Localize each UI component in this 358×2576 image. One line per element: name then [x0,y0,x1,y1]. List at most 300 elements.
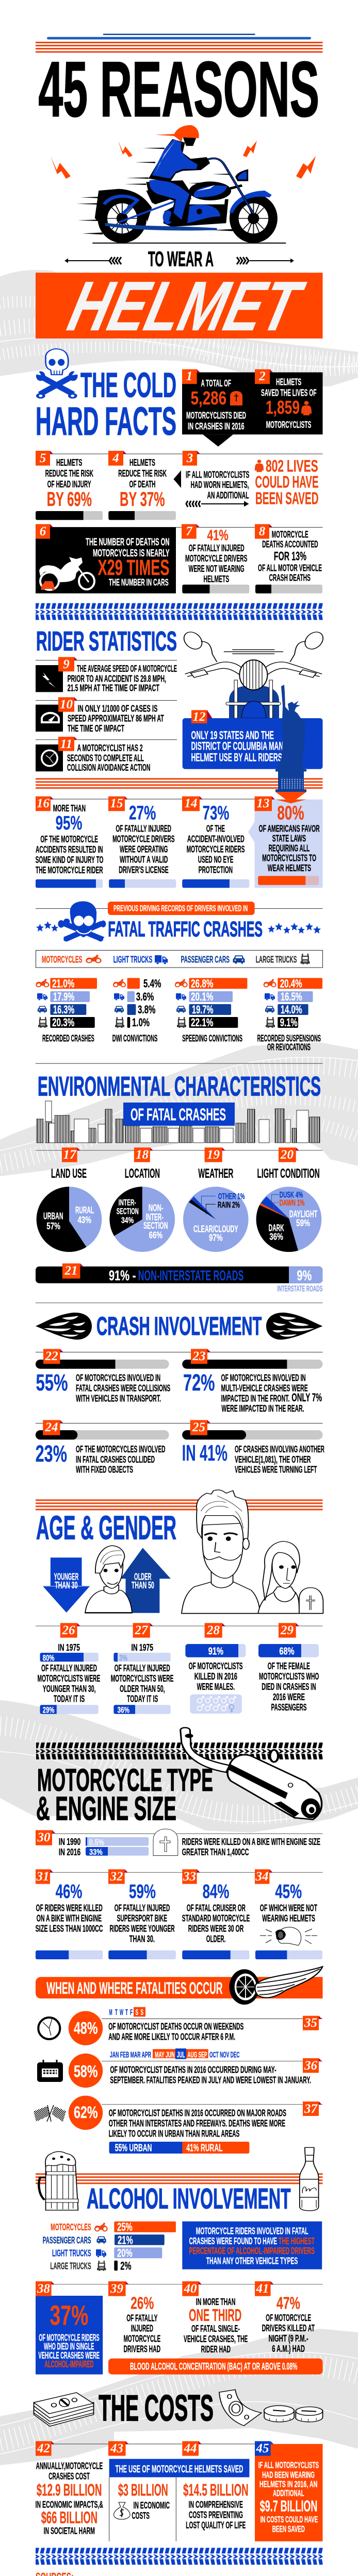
divider: blue tyre tread [36,603,323,620]
tag 25 [190,1420,210,1435]
panel: fact 5 head injury: REDUCE THE RISK [45,468,93,479]
panel: fact 42 annual cost: CRASHES COST [48,2471,90,2482]
panel: fact 10 impact speed [36,697,177,734]
panel: fact 13 americans favor: 80% [277,803,304,824]
callout: previous driving records [108,902,255,915]
panel: fact 22: 55% [36,1369,68,1396]
panel: fact 7 not wearing helmets: 41% [207,527,229,544]
tag 19: 19 [207,1148,220,1162]
heading: the cold hard facts: HARD FACTS [36,399,176,444]
panel: fact 15 license: DRIVER'S LICENSE [119,864,169,875]
tag 26: 26 [62,1623,75,1637]
chart: speeding convictions: 26.8% [191,977,214,990]
chart: recorded suspensions [257,977,322,1052]
panel: fact 4 death: OF DEATH [129,479,156,489]
arrow: older than 50 [120,1548,171,1613]
panel: fact 11 two seconds [36,737,177,773]
panel: fact 30 engine size: IN 2016 [59,1846,80,1857]
divider: black tyre tread [36,1742,323,1759]
illustration: exhaust pipe [181,1727,322,1820]
callout: previous driving records: PREVIOUS DRIVING RECORDS OF DRIVERS INVOLVED IN [113,904,248,913]
panel: fact 7 not wearing helmets [182,524,249,594]
panel: fact 9 average speed: PRIOR TO AN ACCIDENT IS 29.8 MPH, [68,673,166,684]
panel: fact 27 older riders: TODAY IT IS [127,1693,158,1704]
icon: beer mug [39,2151,78,2210]
tag 32: 32 [109,1870,123,1884]
tag 16: 16 [37,796,50,810]
heading: motorcycle type and engine size: & ENGINE SIZE [36,1790,176,1827]
pie: weather: WEATHER [198,1166,233,1181]
pie: light condition [256,1147,321,1252]
chart: recorded crashes: RECORDED CRASHES [42,1033,94,1044]
panel: deaths and lives saved: MOTORCYCLISTS [266,419,311,430]
panel: deaths and lives saved: 5,286 [191,387,226,409]
panel: fact 4 death [108,451,176,520]
panel: fact 42 annual cost: IN ECONOMIC IMPACTS,& [36,2499,103,2510]
panel: fact 29 female passengers: DIED IN CRASHES IN [262,1681,316,1692]
panel: fact 13 americans favor: STATE LAWS [272,833,306,843]
panel: fact 40: VEHICLE CRASHES, THE [184,2333,248,2344]
panel: facts 43-44 helmets saved: COSTS PREVENTING [189,2510,243,2520]
panel: fact 22: FATAL CRASHES WERE COLLISIONS [76,1383,170,1394]
panel: fact 15 license: 27% [129,803,156,824]
tag 18: 18 [136,1148,149,1162]
chart: dwi convictions: 3.6% [136,990,154,1003]
pie: light condition: DARK [269,1222,284,1233]
chart: months: AUG SEP [187,2050,207,2059]
panel: fact 12 state mandates [183,710,323,769]
panel: fact 39: INJURED [131,2323,153,2334]
tag 31 [36,1869,53,1884]
panel: fact 6 deaths vs cars: X29 TIMES [98,555,169,580]
panel: deaths and lives saved: MOTORCYCLISTS DIED [186,410,246,420]
panel: fact 22 [36,1349,170,1403]
panel: fact 42 annual cost: ANNUALLY,MOTORCYCLE [36,2461,103,2471]
icon: checkered flags [34,2105,66,2122]
panel: fact 6 deaths vs cars: MOTORCYCLES IS NEARLY [93,548,170,559]
pie: light condition: DAWN 1% [280,1198,304,1208]
panel: fact 40: ONE THIRD [189,2306,241,2325]
panel: fact 8 13 percent [255,524,322,594]
panel: fact 27 older riders [111,1623,173,1715]
panel: fact 26 younger riders: YOUNGER THAN 30, [43,1683,96,1694]
icon: speedometer box [36,705,63,732]
tag 15: 15 [110,796,123,810]
panel: fact 16 injury [36,796,103,888]
tag 18 [134,1147,153,1162]
bar: interstate vs non-interstate roads: 9% [297,1267,312,1283]
tag 32 [108,1869,128,1884]
arrow: older than 50: THAN 50 [132,1580,154,1590]
chart: months [110,2048,240,2059]
panel: facts 43-44 helmets saved [108,2441,249,2541]
panel: fact 11 two seconds: SECONDS TO COMPLETE ALL [67,752,144,763]
panel: fact 29 female passengers: 2016 WERE [273,1691,305,1702]
chart: months: OCT NOV DEC [209,2050,240,2059]
chart: weekdays: S [140,2008,143,2017]
panel: fact 23: ONLY 7% [291,1391,322,1404]
section line [36,1150,323,1151]
panel: fact 40: RIDER HAD [201,2344,231,2354]
pie: land use: LAND USE [51,1166,87,1181]
panel: fact 15 license: WITHOUT A VALID [120,854,168,865]
panel: fact 13 americans favor: WEAR HELMETS [268,862,311,873]
tag 13: 13 [257,796,269,810]
tag 1: 1 [186,369,192,383]
panel: fact 14 eye protection: PROTECTION [199,864,233,875]
panel: fact 25: IN 41% [182,1440,227,1466]
icon: gender symbols [197,1697,236,1713]
icon: flames left [36,1313,92,1340]
panel: fact 34: 45% [275,1881,302,1903]
tag 34: 34 [255,1870,268,1884]
panel: fact 31 [36,1869,103,1959]
panel: fact 12 state mandates: HELMET USE BY ALL RIDERS [191,751,282,764]
chart: dwi convictions: DWI CONVICTIONS [112,1033,157,1044]
panel: fact 3 lives could be saved [173,451,319,507]
tag 24: 24 [44,1420,58,1434]
illustration: motorcycle rider [51,125,316,244]
panel: fact 7 not wearing helmets: OF FATALLY INJURED [189,543,245,553]
tag 35: 35 [304,2016,317,2030]
panel: fact 16 injury: MORE THAN [53,803,86,814]
tag 37 [303,2102,322,2116]
panel: fact 4 death: REDUCE THE RISK [118,468,167,479]
chart: recorded suspensions: 20.4% [280,977,302,990]
callout: highest percentage: CRASHES WERE FOUND TO HAVE [189,2235,277,2246]
panel: fact 15 license: WERE OPERATING [120,843,168,854]
tag 6 [36,524,53,539]
icon: dollar bill [219,2389,262,2426]
chart: speeding convictions: SPEEDING CONVICTIONS [182,1033,242,1044]
panel: fact 3 lives could be saved: 802 LIVES [266,457,318,476]
section line [36,1302,323,1303]
panel: fact 31: OF RIDERS WERE KILLED [36,1902,103,1913]
panel: fact 33: OF FATAL CRUISER OR [187,1902,246,1913]
panel: fact 45 additional savings: HAD BEEN WEARING [262,2469,315,2480]
panel: deaths and lives saved: 1,859 [266,397,300,418]
row line [36,799,255,800]
panel: fact 28 males [185,1623,246,1714]
tag 36 [303,2058,322,2073]
panel: fact 26 younger riders: TODAY IT IS [54,1693,85,1704]
panel: fact 42 annual cost: $66 BILLION [41,2508,97,2527]
chart: recorded suspensions: 9.1% [280,1016,298,1029]
panel: fact 14 eye protection: ACCIDENT-INVOLVED [187,833,245,844]
pie: land use: 57% [46,1221,60,1231]
tag 10 [58,697,77,712]
tag 33 [182,1869,200,1884]
panel: fact 24: 23% [36,1440,67,1467]
tag 38: 38 [37,2282,51,2296]
chart: alcohol by vehicle type: PASSENGER CARS [43,2235,91,2246]
tyre track: costs section background [0,2329,358,2465]
tag 44: 44 [184,2442,197,2455]
panel: fact 29 female passengers: PASSENGERS [271,1702,306,1713]
tag 2 [255,369,273,384]
panel: fact 26 younger riders: OF FATALLY INJURED [41,1663,97,1673]
pie: location: 34% [121,1215,134,1225]
tyre track: engine section background [0,1700,358,1833]
panel: fact 30 engine size: 33% [89,1848,103,1857]
panel: fact 26 younger riders: IN 1975 [58,1642,80,1653]
panel: fact 12 state mandates: ONLY 19 STATES AND THE [191,728,274,741]
panel: fact 33: RIDERS WERE 30 OR [188,1923,243,1934]
bar: interstate vs non-interstate roads [36,1263,323,1294]
tag 24 [43,1420,63,1435]
illustration: skyline [37,1101,320,1143]
panel: fact 35 weekends: OF MOTORCYCLIST DEATHS OCCUR ON WEEKENDS [108,2021,243,2031]
divider: blue tyre tread [36,2548,323,2565]
panel: fact 8 13 percent: CRASH DEATHS [269,572,311,583]
chart: alcohol by vehicle type: MOTORCYCLES [51,2222,91,2232]
subtitle: to wear a: TO WEAR A [148,247,214,271]
panel: fact 39: DRIVERS HAD [124,2344,160,2354]
chart: alcohol by vehicle type: 25% [117,2221,133,2233]
arrow: left of to wear a [64,257,121,264]
panel: fact 8 13 percent: MOTORCYCLE [272,529,308,539]
tag 12 [191,710,213,724]
chart: speeding convictions: 22.1% [191,1016,214,1029]
panel: fact 3 lives could be saved: HAD WORN HELMETS, [191,479,249,490]
panel: fact 37 major roads: LIKELY TO OCCUR IN URBAN THAN RURAL AREAS [109,2128,239,2139]
chart: weekdays [109,2007,145,2017]
tag 41: 41 [256,2282,269,2296]
heading: motorcycle type and engine size: MOTORCYCLE TYPE [37,1762,213,1798]
panel: facts 43-44 helmets saved: $14.5 BILLION [183,2481,249,2499]
tag 7: 7 [186,524,193,538]
tag 14: 14 [185,796,197,810]
chart: recorded crashes: 17.9% [53,990,74,1003]
panel: fact 15 license [108,796,176,888]
arrow: younger than 30 [43,1557,90,1613]
panel: fact 26 younger riders [38,1623,100,1715]
tag 29 [279,1623,299,1638]
callout: highest percentage: THE HIGHEST [279,2235,315,2246]
panel: fact 28 males: WERE MALES. [197,1681,235,1692]
pie: location: INTER- [119,1197,136,1207]
panel: fact 33: OLDER. [206,1933,225,1944]
panel: fact 32: RIDERS WERE YOUNGER [109,1923,175,1934]
tag 3 [183,451,200,466]
panel: fact 24: OF THE MOTORCYCLES INVOLVED [76,1444,165,1454]
panel: fact 40: IN MORE THAN [196,2296,235,2307]
panel: fact 6 deaths vs cars: THE NUMBER OF DEATHS ON [86,536,169,548]
panel: fact 16 injury: 95% [56,812,82,834]
tag 40 [182,2281,202,2296]
icon: stars right [268,923,321,934]
panel: fact 41 [255,2281,315,2354]
chart: weekdays: T [125,2008,128,2017]
top lines [36,34,323,53]
panel: facts 43-44 helmets saved: IN COMPREHENSIVE [189,2499,243,2510]
pie: location: SECTION [143,1220,168,1231]
panel: fact 42 annual cost: $12.9 BILLION [37,2481,102,2499]
tag 5: 5 [40,451,46,465]
panel: fact 40: OF FATAL SINGLE- [191,2323,240,2334]
panel: fact 27 older riders: OF FATALLY INJURED [115,1663,170,1673]
panel: deaths and lives saved: A TOTAL OF [201,378,231,388]
panel: fact 39: OF FATALLY [126,2313,158,2324]
panel: fact 6 deaths vs cars [36,524,176,594]
row line [36,1872,323,1873]
tag 22: 22 [44,1349,58,1363]
pie: location: SECTION [117,1207,139,1216]
panel: fact 45 additional savings: $9.7 BILLION [260,2497,317,2515]
panel: fact 23: IMPACTED IN THE FRONT. [221,1393,289,1403]
panel: fact 13 americans favor: MOTORCYCLISTS TO [262,853,316,863]
illustration: handlebars [181,630,327,718]
tag 22 [43,1349,63,1364]
tag 23 [191,1349,210,1364]
panel: fact 22: OF MOTORCYCLES INVOLVED IN [76,1372,160,1383]
tag 30 [36,1830,55,1845]
chart: alcohol by vehicle type: 2% [120,2260,131,2272]
panel: fact 33: 84% [203,1881,229,1903]
panel: fact 38 alcohol-impaired: ALCOHOL-IMPAIRED [44,2359,94,2369]
icon: money bag [113,2502,130,2519]
panel: fact 27 older riders: MOTORCYCLISTS WERE [111,1673,173,1684]
panel: fact 9 average speed [36,657,177,693]
tag 21 [62,1263,83,1279]
tag 39 [108,2281,129,2296]
panel: fact 33 [182,1869,250,1959]
panel: fact 30 engine size: IN 1990 [59,1836,80,1847]
panel: fact 26 younger riders: 80% [43,1653,54,1663]
tag 6: 6 [40,524,46,538]
icon: lightning box [36,665,63,692]
tag 35 [303,2016,322,2030]
tag 15 [108,796,128,811]
tag 27: 27 [134,1623,149,1637]
chart: weekdays: T [115,2008,118,2017]
tag 45 [255,2441,274,2456]
panel: fact 4 death: BY 37% [120,488,165,511]
pie: location: LOCATION [125,1166,160,1181]
panel: fact 37 major roads: 55% URBAN [115,2143,152,2154]
chart: alcohol by vehicle type: LIGHT TRUCKS [52,2247,91,2258]
icon: helmet [260,1927,317,1945]
illustration: man and woman with tombstone [182,1490,323,1614]
legend: vehicle types [36,950,323,968]
chart: recorded suspensions: 16.5% [281,990,302,1003]
icon: winged wheel [229,1967,322,2005]
chart: speeding convictions: 19.7% [192,1003,214,1016]
pie: land use: 43% [77,1214,91,1225]
heading: the cold hard facts: THE COLD [80,366,176,405]
panel: fact 38 alcohol-impaired: WHO DIED IN SINGLE [44,2341,94,2352]
chart: recorded suspensions: 14.0% [281,1003,302,1016]
tag 44 [182,2441,202,2456]
icon: clock box [36,744,63,771]
panel: fact 35 weekends [38,2007,322,2045]
tag 39: 39 [110,2282,124,2296]
tag 34 [255,1869,272,1884]
panel: fact 14 eye protection: MOTORCYCLE RIDERS [187,843,245,854]
panel: fact 29 female passengers: OF THE FEMALE [268,1660,310,1671]
chart: alcohol by vehicle type: LARGE TRUCKS [50,2261,91,2271]
tag 28 [205,1623,225,1638]
heading: rider statistics: RIDER STATISTICS [36,626,177,657]
tag 9 [58,657,77,671]
chart: dwi convictions: 3.8% [138,1003,156,1016]
panel: fact 26 younger riders: 29% [43,1705,54,1715]
stripes divider [36,778,323,789]
panel: fact 16 injury: THE MOTORCYCLE RIDER [36,865,103,875]
tag 41 [255,2281,274,2296]
row line [36,527,323,528]
tag 11 [58,737,77,751]
panel: fact 16 injury: SOME KIND OF INJURY TO [36,854,103,865]
panel: fact 16 injury: ACCIDENTS RESULTED IN [36,844,103,855]
panel: fact 9 average speed: 21.5 MPH AT THE TIME OF IMPACT [68,683,159,693]
heading: age and gender: AGE & GENDER [36,1509,176,1546]
chart: weekdays: M [109,2008,112,2017]
tag 1 [182,369,200,384]
panel: fact 14 eye protection: USED NO EYE [198,854,233,865]
panel: fact 27 older riders: IN 1975 [131,1642,153,1653]
icon: white motorcycle with car [39,557,94,590]
legend: vehicle types: PASSENGER CARS [181,954,230,965]
panel: fact 42 annual cost: IN SOCIETAL HARM [44,2525,95,2536]
row line [36,453,323,454]
chart: weekdays: W [120,2008,123,2017]
icon: stars left [36,921,58,931]
icon: skull and crossbones [58,901,106,941]
panel: fact 24 [36,1420,169,1475]
chart: alcohol by vehicle type: 21% [118,2234,133,2246]
panel: fact 31: SIZE LESS THAN 1000CC [36,1923,103,1934]
stripes divider [36,1499,323,1511]
panel: fact 45 additional savings: BEEN SAVED [272,2523,305,2534]
chart: speeding convictions: 20.1% [191,990,214,1003]
panel: fact 32: THAN 30. [129,1933,155,1944]
tag 10: 10 [60,698,73,711]
icon: clock [38,2018,60,2039]
icon: beer bottle [300,2147,319,2211]
panel: fact 35 weekends: AND ARE MORE LIKELY TO OCCUR AFTER 6 P.M. [108,2031,235,2042]
pie: location: NON- [149,1202,163,1213]
panel: deaths and lives saved: IN CRASHES IN 2016 [188,420,245,431]
tag 33: 33 [183,1870,196,1884]
tag 36: 36 [304,2059,318,2073]
section line [36,1625,323,1626]
panel: fact 5 head injury: HELMETS [56,457,82,468]
legend: vehicle types: LIGHT TRUCKS [113,954,152,965]
pie: light condition: 59% [296,1217,310,1228]
panel: fact 24: WITH FIXED OBJECTS [76,1464,133,1475]
panel: fact 23 [182,1349,323,1414]
panel: fact 39: MOTORCYCLE [124,2333,160,2344]
tag 17 [62,1147,80,1162]
panel: facts 43-44 helmets saved: LOST QUALITY OF LIFE [186,2520,246,2531]
panel: fact 4 death: HELMETS [129,457,155,468]
panel: facts 43-44 helmets saved: $3 BILLION [118,2481,168,2499]
chart: recorded crashes: 21.0% [52,977,74,990]
section line [36,1063,323,1064]
panel: fact 37 major roads: 62% [74,2103,98,2122]
panel: fact 41: DRIVERS KILLED AT [262,2323,315,2333]
illustration: young man [85,1546,132,1613]
arrow: younger than 30: THAN 30 [55,1580,77,1590]
panel: fact 5 head injury: BY 69% [47,488,92,511]
panel: fact 30 engine size: 0.5% [89,1838,104,1847]
panel: fact 28 males: KILLED IN 2016 [194,1671,237,1682]
chart: weekdays: S [135,2008,138,2017]
panel: fact 7 not wearing helmets: WERE NOT WEARING [189,563,245,574]
tag 8: 8 [259,524,266,538]
panel: fact 30 engine size [36,1829,323,1857]
